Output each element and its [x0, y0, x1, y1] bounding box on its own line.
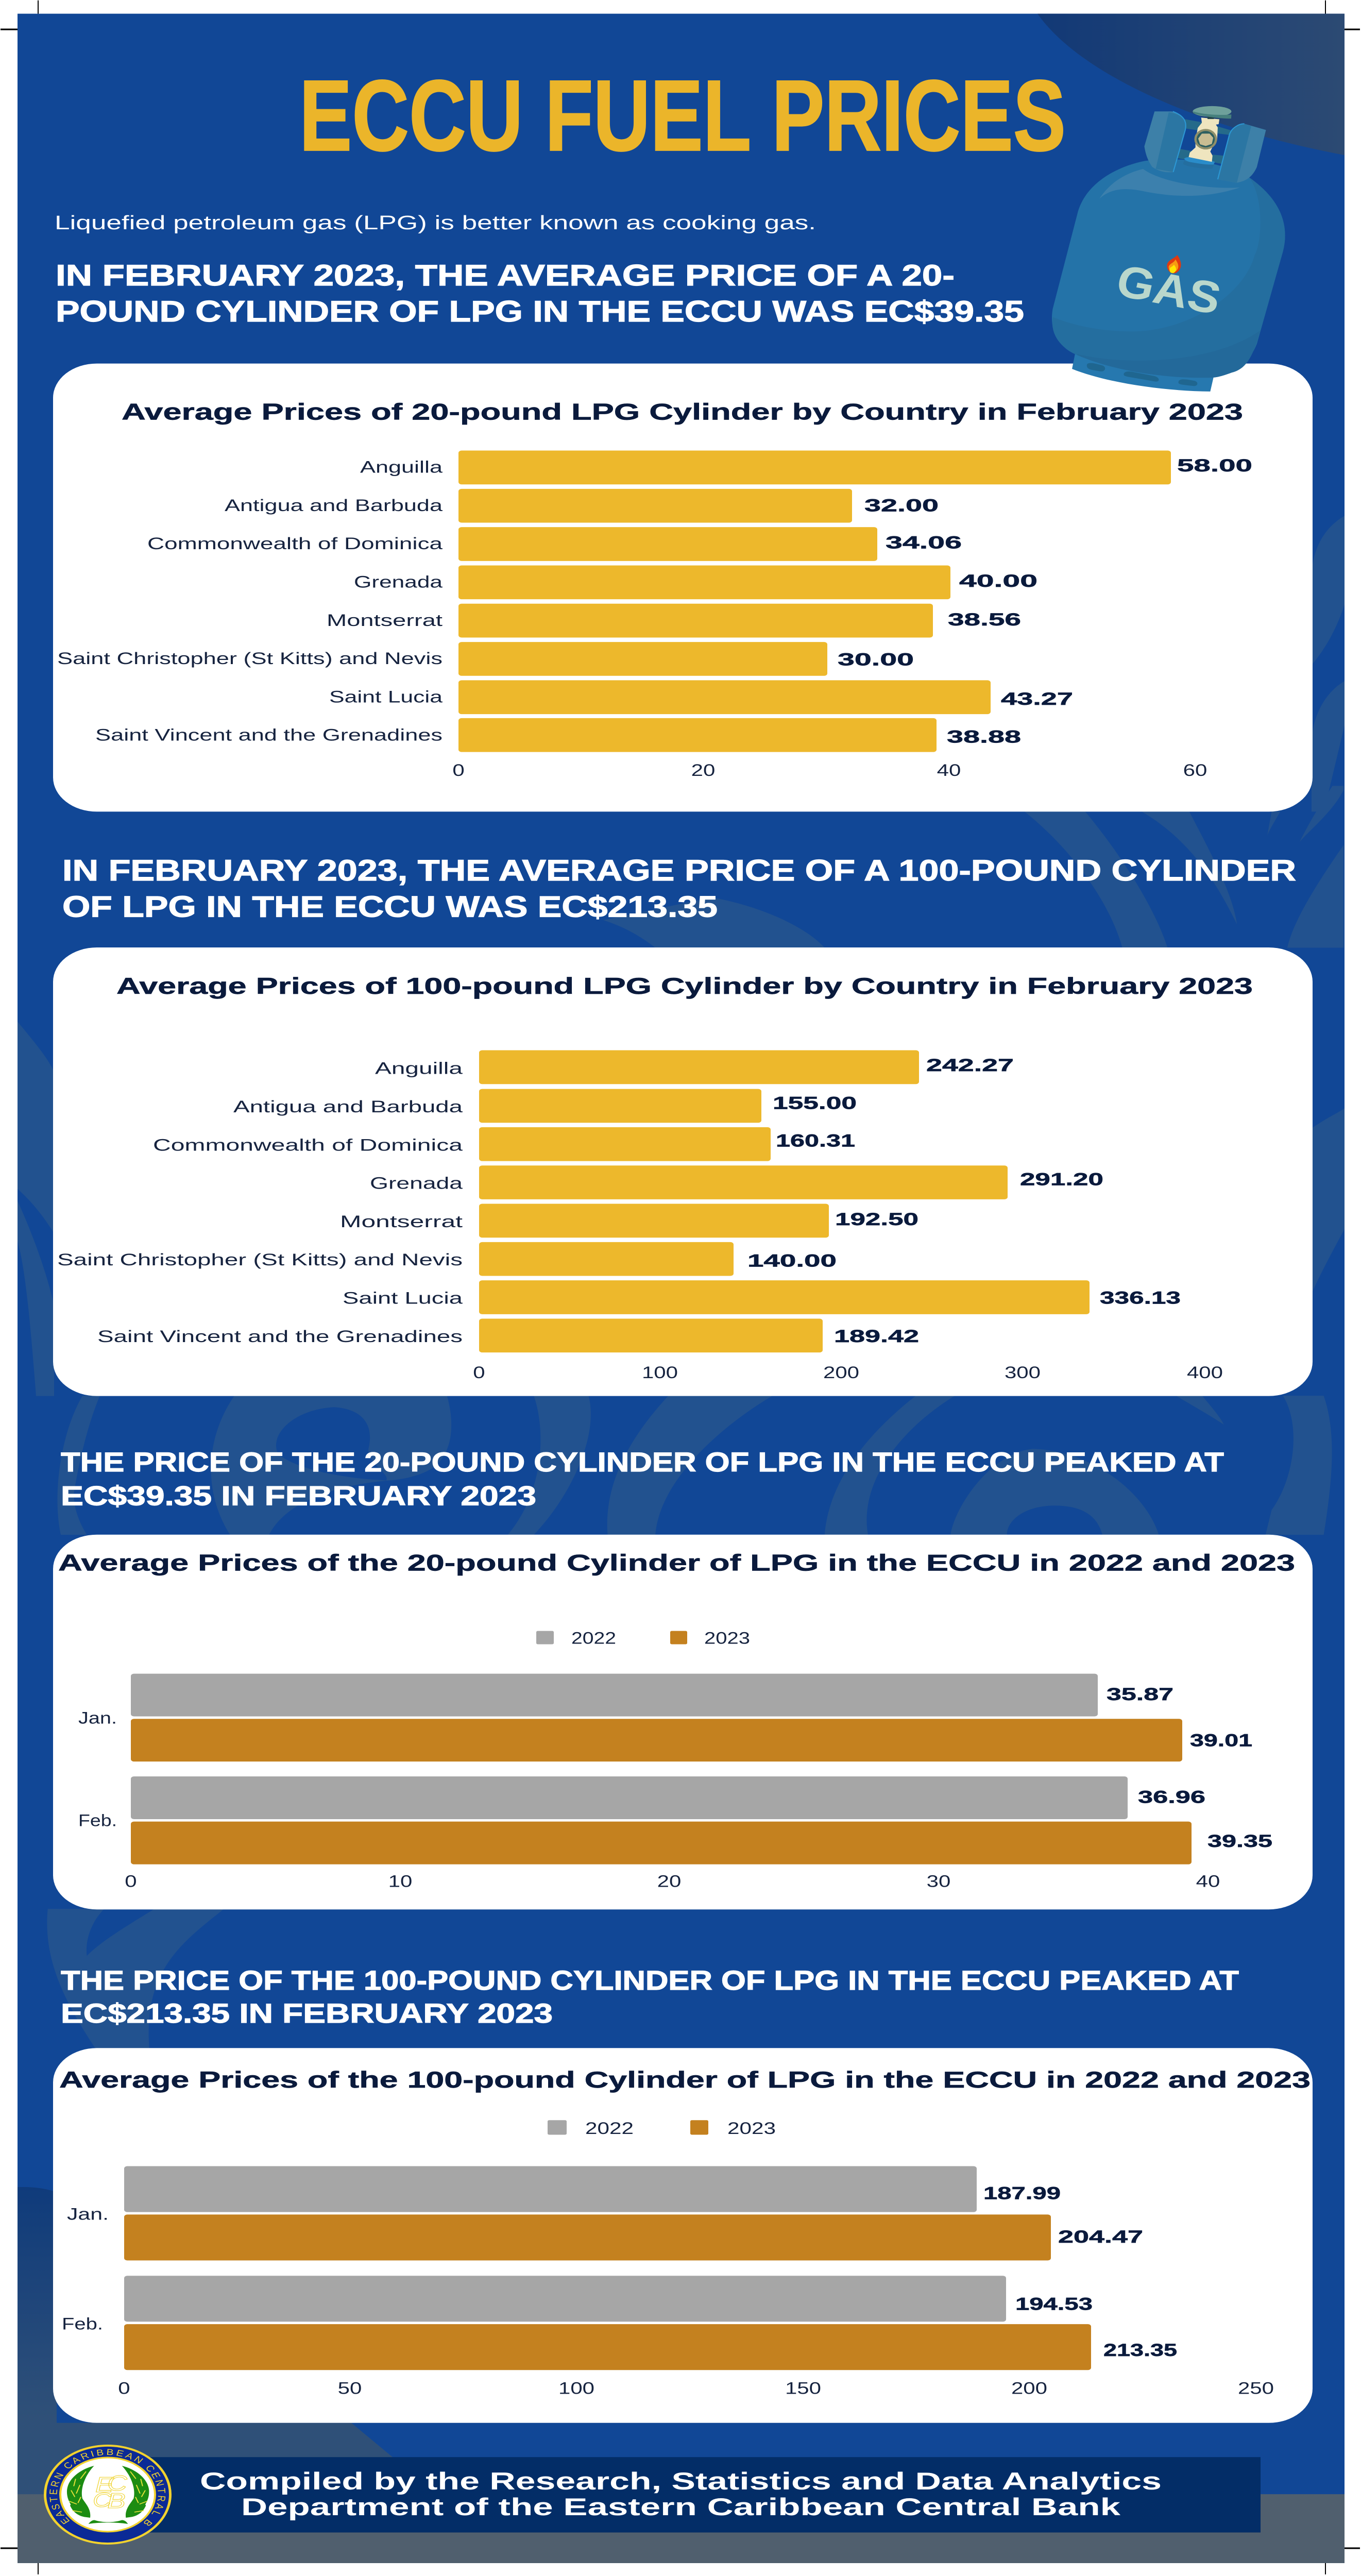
heading: 20-pound average	[56, 259, 1024, 328]
country labels: Montserrat	[327, 611, 443, 630]
values	[838, 456, 1252, 747]
values: 32.00	[864, 496, 939, 515]
values: 291.20	[1020, 1170, 1103, 1189]
axis: 30	[927, 1872, 950, 1890]
legend: 2022	[585, 2119, 634, 2138]
footer band: Compiled by the Research, Statistics and Data Analytics	[200, 2468, 1162, 2495]
legend: 2023	[727, 2119, 776, 2138]
values: 40.00	[959, 571, 1037, 591]
heading: 100-pound peak: EC$213.35 IN FEBRUARY 2023	[61, 1998, 553, 2028]
axis: 0	[452, 760, 465, 779]
country labels: Saint Vincent and the Grenadines	[97, 1327, 463, 1346]
country labels: Antigua and Barbuda	[233, 1097, 463, 1116]
country labels	[57, 458, 443, 744]
category labels	[62, 2205, 109, 2333]
axis: 0	[118, 2379, 130, 2397]
panel: 100-pound by country	[53, 947, 1313, 1396]
heading: 100-pound average: IN FEBRUARY 2023, THE AVERAGE PRICE OF A 100-POUND CYLINDER	[62, 854, 1296, 887]
country labels	[57, 1059, 463, 1346]
values: 242.27	[926, 1056, 1014, 1075]
values: 35.87	[1107, 1685, 1173, 1704]
category labels: Feb.	[78, 1811, 117, 1829]
axis: 200	[823, 1363, 859, 1382]
values: 36.96	[1138, 1787, 1205, 1807]
axis: 0	[473, 1363, 485, 1382]
bars	[479, 1050, 1090, 1352]
values: 194.53	[1015, 2294, 1093, 2314]
values: 187.99	[983, 2183, 1061, 2203]
laurel	[67, 2466, 149, 2524]
chart title: Average Prices of the 20-pound Cylinder of LPG in the ECCU in 2022 and 2023	[58, 1550, 1295, 1575]
logo: ECCB seal	[44, 2445, 172, 2545]
country labels: Antigua and Barbuda	[225, 496, 443, 515]
icon label: GAS: GAS	[1112, 256, 1226, 324]
values: 38.56	[948, 610, 1021, 630]
values: 34.06	[886, 533, 962, 552]
monogram: C	[93, 2488, 112, 2511]
values: 213.35	[1103, 2340, 1177, 2360]
country labels: Anguilla	[360, 458, 443, 477]
heading: 20-pound average: IN FEBRUARY 2023, THE AVERAGE PRICE OF A 20-	[56, 259, 955, 292]
values: 140.00	[747, 1251, 837, 1270]
country labels: Saint Christopher (St Kitts) and Nevis	[57, 1250, 463, 1269]
category labels: Feb.	[62, 2315, 103, 2333]
axis: 0	[125, 1872, 137, 1890]
icon: gas cylinder	[1052, 106, 1285, 392]
panel: 20-pound 2022 vs 2023	[53, 1535, 1313, 1909]
category labels: Jan.	[78, 1709, 117, 1727]
legend	[548, 2119, 776, 2138]
values: 189.42	[834, 1326, 919, 1346]
category labels	[78, 1709, 117, 1829]
country labels: Saint Vincent and the Grenadines	[95, 726, 443, 744]
bars	[458, 451, 1171, 752]
axis: 250	[1238, 2379, 1274, 2397]
heading: 20-pound peak	[61, 1447, 1224, 1511]
category labels: Jan.	[67, 2205, 109, 2223]
country labels: Grenada	[354, 573, 443, 591]
monogram: C	[107, 2472, 127, 2496]
heading: 100-pound average	[62, 854, 1296, 924]
country labels: Saint Lucia	[343, 1289, 463, 1307]
values	[747, 1056, 1181, 1346]
panel: 100-pound 2022 vs 2023	[53, 2048, 1313, 2423]
chart title: Average Prices of 20-pound LPG Cylinder by Country in February 2023	[122, 399, 1243, 425]
bars	[124, 2166, 1091, 2370]
footer band	[149, 2457, 1261, 2533]
intro text: Liquefied petroleum gas (LPG) is better known as cooking gas.	[55, 212, 816, 234]
heading: 100-pound peak: THE PRICE OF THE 100-POUND CYLINDER OF LPG IN THE ECCU PEAKED AT	[61, 1965, 1239, 1995]
axis: 50	[338, 2379, 362, 2397]
country labels: Anguilla	[375, 1059, 463, 1078]
monogram: E	[95, 2473, 114, 2497]
monogram: B	[107, 2489, 126, 2513]
panel: 20-pound by country	[53, 364, 1313, 811]
axis: 60	[1183, 760, 1207, 779]
values: 204.47	[1058, 2227, 1143, 2247]
heading: 100-pound average: OF LPG IN THE ECCU WAS EC$213.35	[62, 890, 718, 924]
heading: 20-pound average: POUND CYLINDER OF LPG IN THE ECCU WAS EC$39.35	[56, 295, 1024, 328]
country labels: Montserrat	[340, 1212, 463, 1231]
icon: flame	[1167, 255, 1181, 274]
bars	[131, 1674, 1192, 1865]
values: 43.27	[1001, 689, 1073, 709]
values: 39.01	[1190, 1731, 1252, 1750]
values: 38.88	[947, 727, 1021, 747]
axis	[452, 760, 1207, 779]
footer band: Department of the Eastern Caribbean Central Bank	[241, 2494, 1120, 2520]
country labels: Commonwealth of Dominica	[153, 1136, 463, 1154]
country labels: Saint Lucia	[329, 688, 443, 706]
country labels: Commonwealth of Dominica	[147, 534, 443, 553]
chart title: Average Prices of 100-pound LPG Cylinder by Country in February 2023	[116, 973, 1253, 999]
values: 336.13	[1100, 1288, 1181, 1308]
axis: 100	[642, 1363, 678, 1382]
axis: 300	[1005, 1363, 1041, 1382]
values: 160.31	[776, 1131, 855, 1150]
country labels: Saint Christopher (St Kitts) and Nevis	[57, 649, 443, 668]
heading: 100-pound peak	[61, 1965, 1239, 2028]
axis: 40	[937, 760, 961, 779]
legend: 2022	[571, 1629, 616, 1648]
values: 58.00	[1177, 456, 1252, 476]
axis	[125, 1872, 1220, 1890]
axis: 10	[388, 1872, 412, 1890]
monogram	[93, 2472, 127, 2513]
values: 155.00	[773, 1093, 857, 1113]
axis	[118, 2379, 1274, 2397]
legend	[536, 1629, 750, 1648]
chart title: Average Prices of the 100-pound Cylinder of LPG in the ECCU in 2022 and 2023	[59, 2067, 1311, 2093]
axis: 40	[1196, 1872, 1220, 1890]
axis: 20	[657, 1872, 681, 1890]
axis	[473, 1363, 1223, 1382]
heading: 20-pound peak: EC$39.35 IN FEBRUARY 2023	[61, 1481, 536, 1511]
axis: 20	[691, 760, 715, 779]
values	[1107, 1685, 1272, 1851]
country labels: Grenada	[370, 1174, 463, 1193]
axis: 400	[1187, 1363, 1223, 1382]
axis: 100	[558, 2379, 594, 2397]
axis: 200	[1011, 2379, 1047, 2397]
heading: 20-pound peak: THE PRICE OF THE 20-POUND CYLINDER OF LPG IN THE ECCU PEAKED AT	[61, 1447, 1224, 1477]
legend: 2023	[704, 1629, 750, 1648]
values	[983, 2183, 1177, 2360]
values: 192.50	[835, 1209, 918, 1229]
values: 39.35	[1207, 1831, 1272, 1851]
values: 30.00	[838, 650, 914, 669]
axis: 150	[785, 2379, 821, 2397]
